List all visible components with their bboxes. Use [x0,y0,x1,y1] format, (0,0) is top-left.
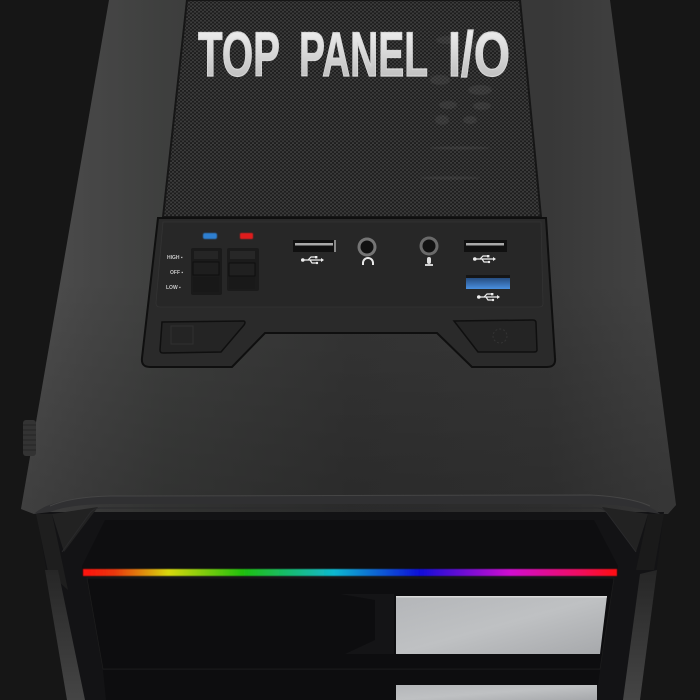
fan speed labels: LOW ▪ [166,285,181,291]
fan speed labels: OFF ▪ [170,270,183,276]
top mesh vent [163,0,541,217]
fan speed labels: HIGH ▪ [167,255,183,261]
LED mode button [454,320,537,352]
USB 2.0 port [293,240,336,264]
title [198,20,510,90]
title: TOP [198,20,280,90]
USB 2.0 port right [464,240,507,263]
USB 3.0 port [466,275,510,301]
microphone jack [420,236,438,266]
drive bay 1 [87,578,614,669]
lower trim left [45,570,85,700]
front recess [82,520,618,576]
fan speed labels [166,255,183,291]
headphone jack [358,238,376,265]
case top surface [21,0,676,514]
front panel [36,507,664,700]
title: PANEL [299,20,428,90]
fan switch right [227,248,259,291]
mesh fan marks [420,36,492,180]
side knob [23,420,36,456]
I/O bezel [142,218,555,367]
front recess outline [62,508,636,552]
front lip of case [34,495,660,514]
drive bay 2 [103,670,600,700]
title: I/O [448,20,510,90]
power button [160,321,245,353]
corner panel right [602,507,648,552]
lower trim right [623,570,657,700]
LED: blue [203,233,217,239]
side frame left [36,514,68,590]
recessed port plate [156,222,543,307]
fan switch left [191,248,222,295]
side frame right [636,514,664,570]
RGB light strip [83,569,617,576]
corner panel left [52,507,98,552]
LED: red [240,233,253,239]
